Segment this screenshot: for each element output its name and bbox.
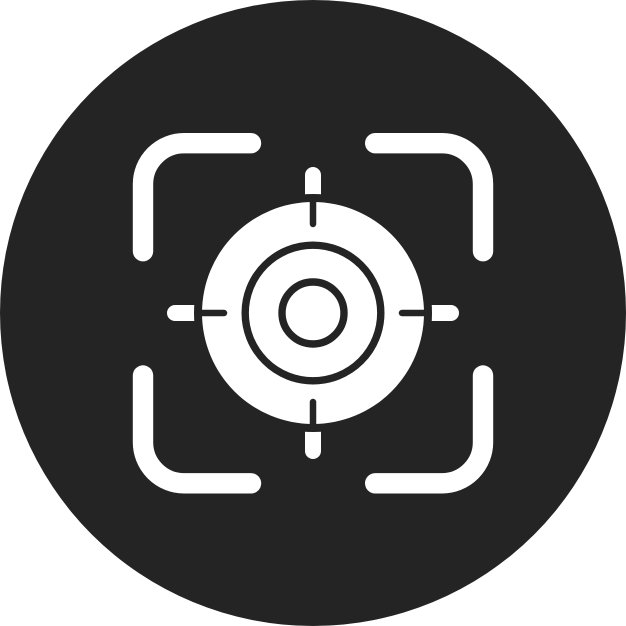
crosshair ticks inner — [198, 198, 428, 428]
target disc — [202, 202, 424, 424]
crosshair ticks outer — [175, 175, 451, 451]
outer ring — [245, 245, 381, 381]
target — [175, 175, 451, 451]
inner ring — [282, 282, 344, 344]
gap ring around disc — [194, 194, 432, 432]
viewfinder corners — [143, 143, 483, 483]
